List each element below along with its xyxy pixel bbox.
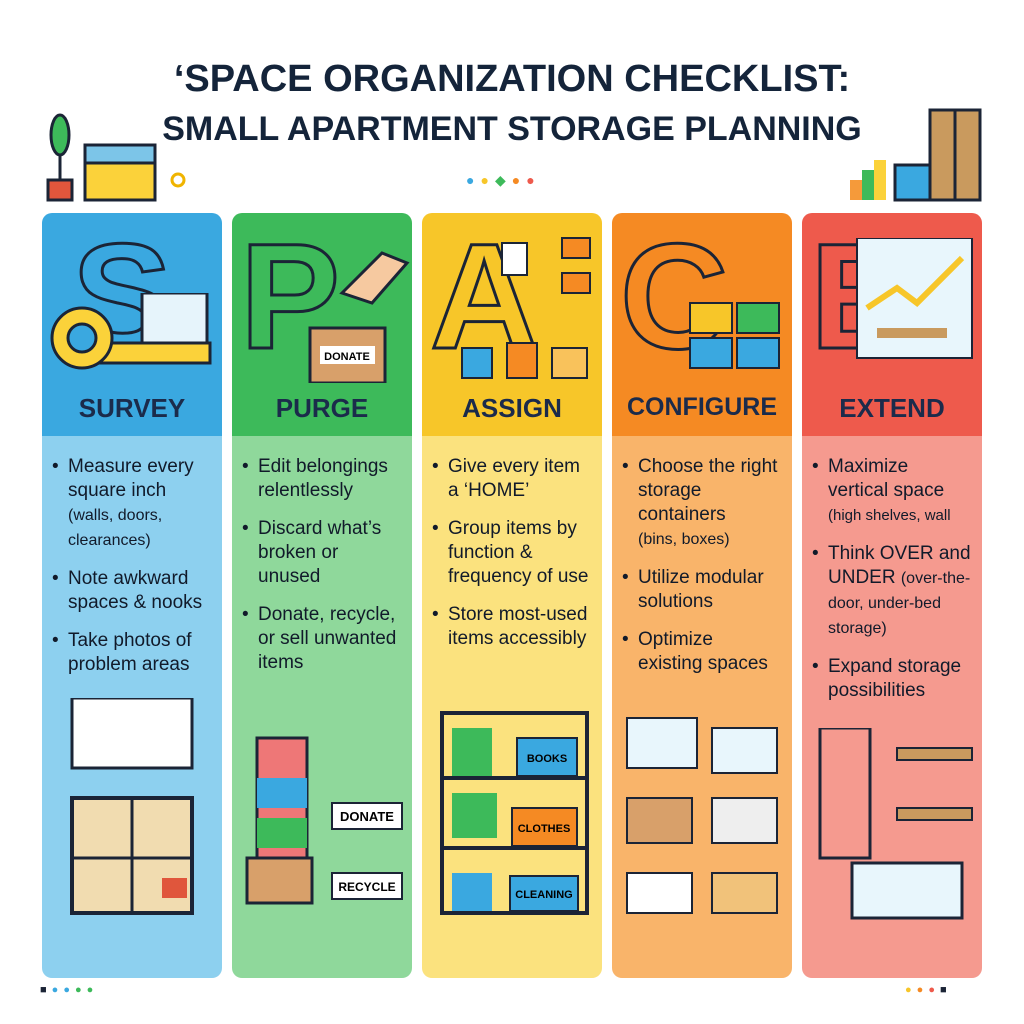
decorative dots: ●●◆●● (466, 172, 541, 188)
panel: survey (42, 213, 222, 978)
survey bullets: Note awkward (68, 568, 188, 589)
icon: containers and baskets (626, 717, 778, 914)
subtitle: SMALL APARTMENT STORAGE PLANNING (162, 110, 862, 148)
assign bullets: Store most-used (448, 604, 587, 625)
heading: survey: SURVEY (79, 393, 185, 423)
icon: shelves and cabinet (850, 108, 982, 202)
heading: extend: EXTEND (839, 393, 945, 423)
purge bullets: unused (258, 566, 320, 587)
panel: purge (232, 213, 412, 978)
icon: stacked bins (689, 302, 780, 369)
icon: growth chart (856, 238, 973, 359)
icon: stack of clothes with donate/recycle: RECYCLE (338, 880, 396, 894)
icon: labeled shelf: BOOKS (527, 753, 567, 765)
text: ●●●■ (905, 984, 952, 996)
heading: purge: PURGE (276, 393, 368, 423)
extend bullets: door, under-bed (828, 595, 941, 612)
survey bullets: (walls, doors, (68, 507, 162, 524)
big letter E: E (810, 213, 910, 380)
icon: plant and briefcase (46, 114, 186, 202)
title: ‘SPACE ORGANIZATION CHECKLIST: (174, 58, 850, 100)
extend bullets: storage) (828, 620, 887, 637)
extend bullets: vertical space (828, 480, 944, 501)
survey bullets (52, 456, 202, 675)
survey bullets: square inch (68, 480, 166, 501)
icon: labeled shelf: CLOTHES (518, 823, 570, 835)
survey bullets: Take photos of (68, 630, 192, 651)
configure bullets: Utilize modular (638, 567, 764, 588)
assign bullets: frequency of use (448, 566, 588, 587)
survey bullets: problem areas (68, 654, 189, 675)
purge bullets: Donate, recycle, (258, 604, 395, 625)
assign bullets (432, 456, 588, 649)
big letter C: C (620, 213, 728, 380)
configure bullets: storage (638, 480, 701, 501)
panel: configure (612, 213, 792, 978)
icon: stack of clothes with donate/recycle (246, 736, 403, 904)
survey bullets: clearances) (68, 532, 151, 549)
purge bullets: broken or (258, 542, 338, 563)
configure bullets: existing spaces (638, 653, 768, 674)
extend bullets: Think OVER and (828, 543, 971, 564)
icon: floor plans (70, 698, 194, 915)
configure bullets: Choose the right (638, 456, 777, 477)
big letter P: P (240, 213, 340, 380)
assign bullets: Give every item (448, 456, 580, 477)
extend bullets: (high shelves, wall (828, 507, 951, 524)
configure bullets (622, 456, 778, 674)
extend bullets: Maximize (828, 456, 908, 477)
assign bullets: a ‘HOME’ (448, 480, 529, 501)
footer dots: ■●●●● (40, 984, 98, 996)
icon: donate box (308, 251, 410, 383)
survey bullets: Measure every (68, 456, 194, 477)
panel: assign (422, 213, 602, 978)
icon: donate box: DONATE (324, 351, 370, 363)
heading: configure: CONFIGURE (627, 393, 777, 421)
extend bullets: UNDER (over-the- (828, 567, 970, 588)
icon: file tree (461, 237, 591, 379)
purge bullets: Edit belongings (258, 456, 388, 477)
extend bullets: possibilities (828, 680, 925, 701)
configure bullets: (bins, boxes) (638, 531, 730, 548)
icon: labeled shelf: CLEANING (515, 889, 573, 901)
icon: shoe rack, shelves, bin (818, 728, 973, 920)
survey bullets: spaces & nooks (68, 592, 202, 613)
assign bullets: Group items by (448, 518, 577, 539)
icon: labeled shelf (440, 711, 589, 915)
configure bullets: Optimize (638, 629, 713, 650)
configure bullets: containers (638, 504, 726, 525)
heading: assign: ASSIGN (462, 393, 562, 423)
panel: extend (802, 213, 982, 978)
extend bullets (812, 456, 971, 701)
purge bullets: items (258, 652, 303, 673)
big letter S: S (72, 213, 172, 380)
purge bullets: Discard what’s (258, 518, 381, 539)
assign bullets: function & (448, 542, 532, 563)
assign bullets: items accessibly (448, 628, 586, 649)
extend bullets: Expand storage (828, 656, 961, 677)
icon: stack of clothes with donate/recycle: DONATE (340, 809, 394, 824)
purge bullets: or sell unwanted (258, 628, 396, 649)
purge bullets (242, 456, 396, 673)
big letter A: A (430, 213, 538, 380)
purge bullets: relentlessly (258, 480, 353, 501)
icon: tape measure (50, 293, 212, 370)
configure bullets: solutions (638, 591, 713, 612)
